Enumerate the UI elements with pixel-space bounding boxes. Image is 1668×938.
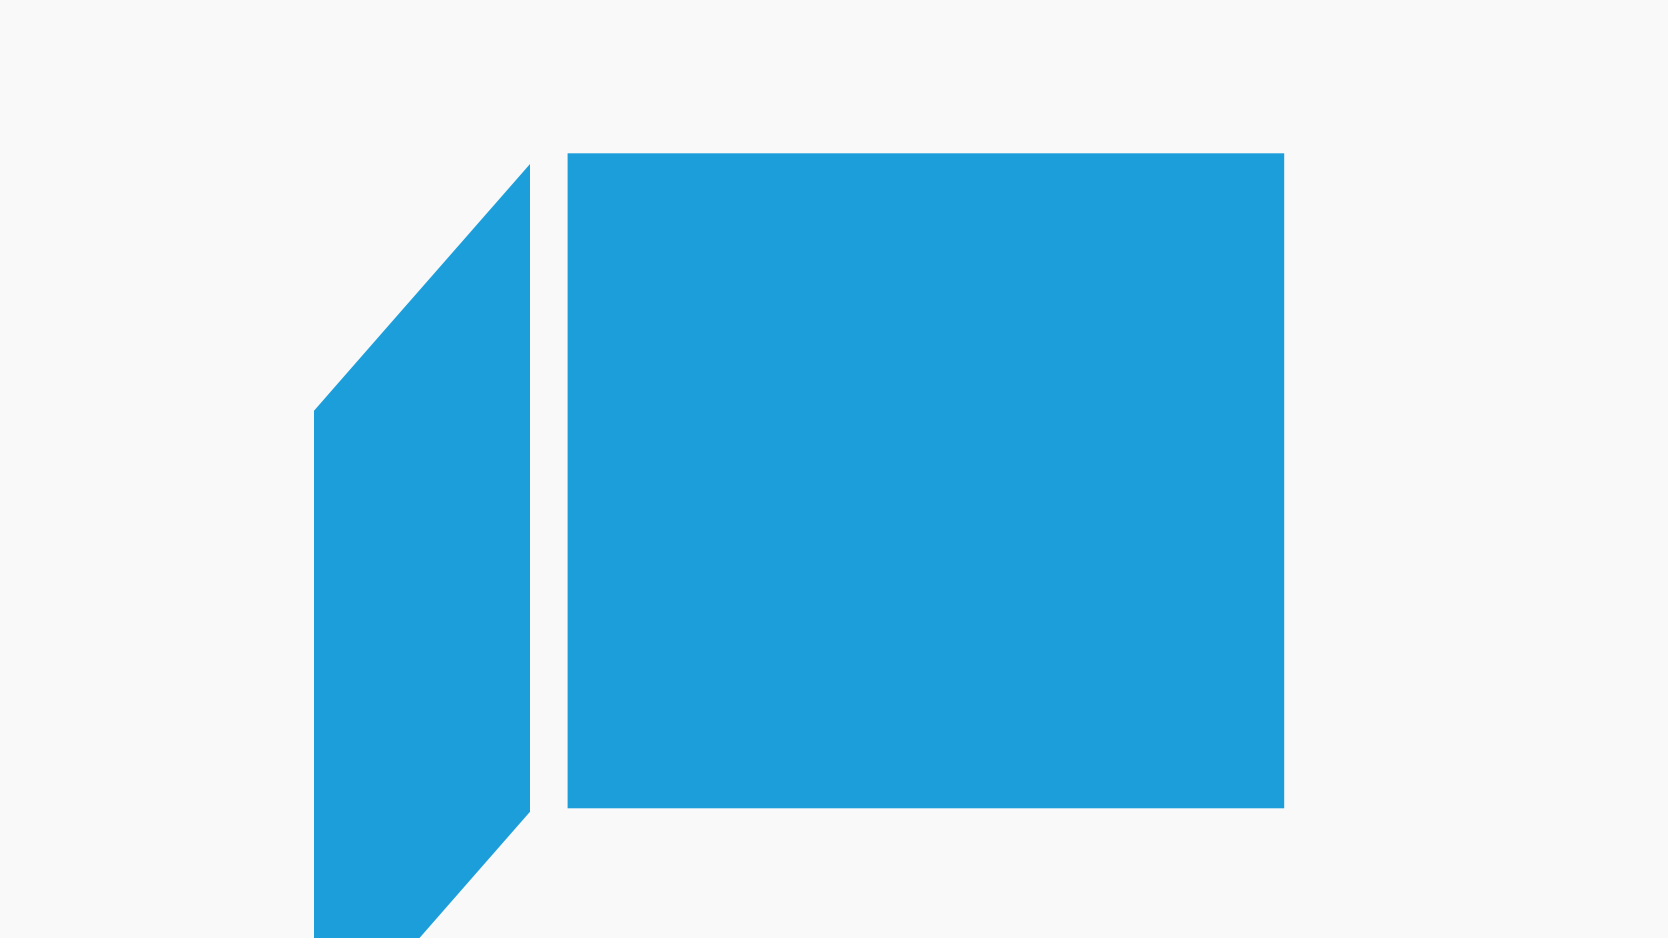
icon: blue rectangle panel [568, 153, 1284, 808]
icon: slanted blue parallelogram panel [314, 164, 530, 938]
